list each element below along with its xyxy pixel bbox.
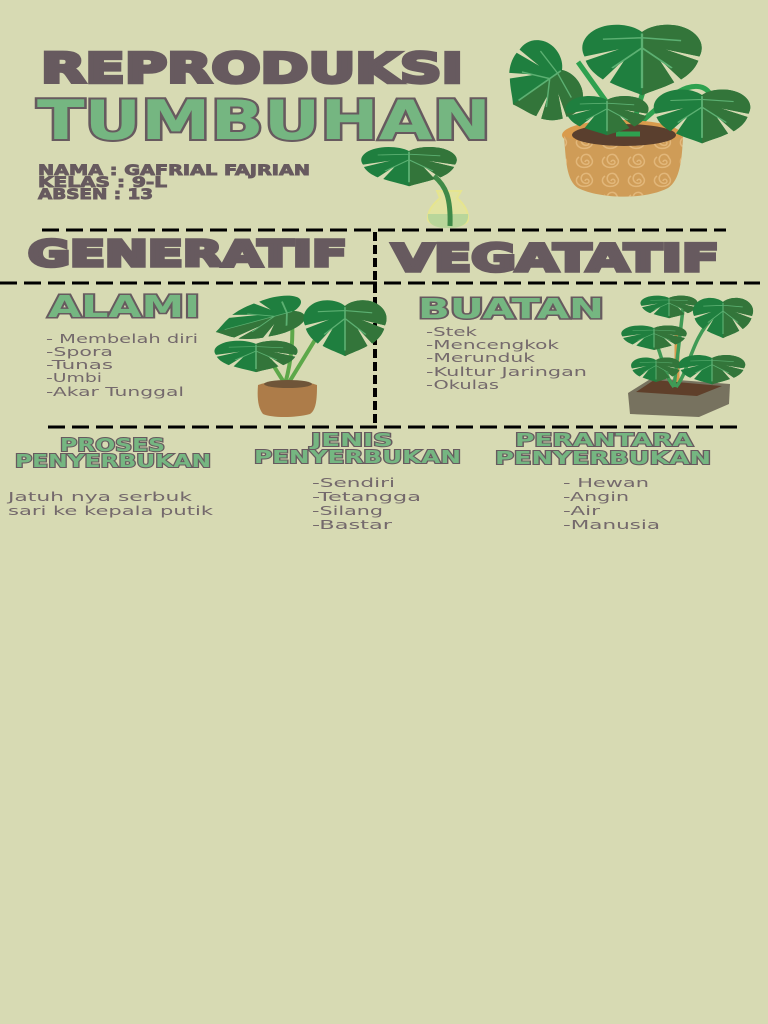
author details	[38, 163, 310, 203]
list: Perantara	[563, 476, 660, 532]
heading: Perantara Penyerbukan: PERANTARA	[515, 430, 693, 451]
list: Alami: -Spora	[46, 345, 113, 359]
list: Jenis: -Bastar	[312, 518, 392, 532]
heading: Perantara Penyerbukan: PENYERBUKAN	[495, 448, 711, 469]
section dividers	[0, 230, 760, 427]
list: Jenis: -Tetangga	[312, 490, 421, 504]
list: Perantara: -Air	[563, 504, 600, 518]
heading: Jenis Penyerbukan: JENIS	[308, 430, 393, 451]
title: Tumbuhan: TUMBUHAN	[37, 89, 491, 152]
author details: KELAS : 9-L	[38, 175, 167, 191]
list: Alami: -Tunas	[46, 358, 113, 372]
heading: Buatan: BUATAN	[418, 292, 604, 325]
title: Reproduksi: REPRODUKSI	[41, 44, 463, 92]
heading: Proses Penyerbukan	[15, 435, 211, 472]
author details: NAMA : GAFRIAL FAJRIAN	[38, 163, 310, 179]
text: Proses description	[6, 490, 213, 518]
list: Buatan	[426, 325, 587, 392]
list: Perantara: - Hewan	[563, 476, 649, 490]
heading: Jenis Penyerbukan: PENYERBUKAN	[254, 447, 461, 468]
list: Jenis: -Silang	[312, 504, 383, 518]
list: Buatan: -Stek	[426, 325, 477, 339]
icon: monstera in grey planter	[621, 296, 753, 417]
list: Alami: -Umbi	[46, 371, 102, 385]
text: Proses description: sari ke kepala putik	[8, 504, 213, 518]
list: Buatan: -Merunduk	[426, 351, 535, 365]
heading: Vegatatif: VEGATATIF	[392, 237, 719, 280]
list: Alami: - Membelah diri	[46, 332, 198, 346]
list: Buatan: -Mencengkok	[426, 338, 559, 352]
list: Alami: -Akar Tunggal	[46, 385, 184, 399]
list: Buatan: -Okulas	[426, 378, 499, 392]
list: Perantara: -Angin	[563, 490, 629, 504]
heading: Generatif: GENERATIF	[28, 234, 347, 275]
author details: ABSEN : 13	[38, 187, 153, 203]
list: Alami	[46, 332, 198, 399]
icon: monstera cutting in glass vase	[361, 147, 468, 228]
text: Proses description: Jatuh nya serbuk	[6, 490, 192, 504]
heading: Perantara Penyerbukan	[495, 430, 711, 469]
heading: Alami: ALAMI	[48, 290, 200, 325]
heading: Jenis Penyerbukan	[254, 430, 461, 468]
list: Jenis: -Sendiri	[312, 476, 395, 490]
list: Buatan: -Kultur Jaringan	[426, 365, 587, 379]
icon: monstera in brown basket	[211, 291, 387, 417]
heading: Proses Penyerbukan: PROSES	[60, 435, 165, 456]
list: Perantara: -Manusia	[563, 518, 660, 532]
icon: large monstera in woven pot	[489, 25, 750, 197]
list: Jenis	[312, 476, 421, 532]
heading: Proses Penyerbukan: PENYERBUKAN	[15, 451, 211, 472]
